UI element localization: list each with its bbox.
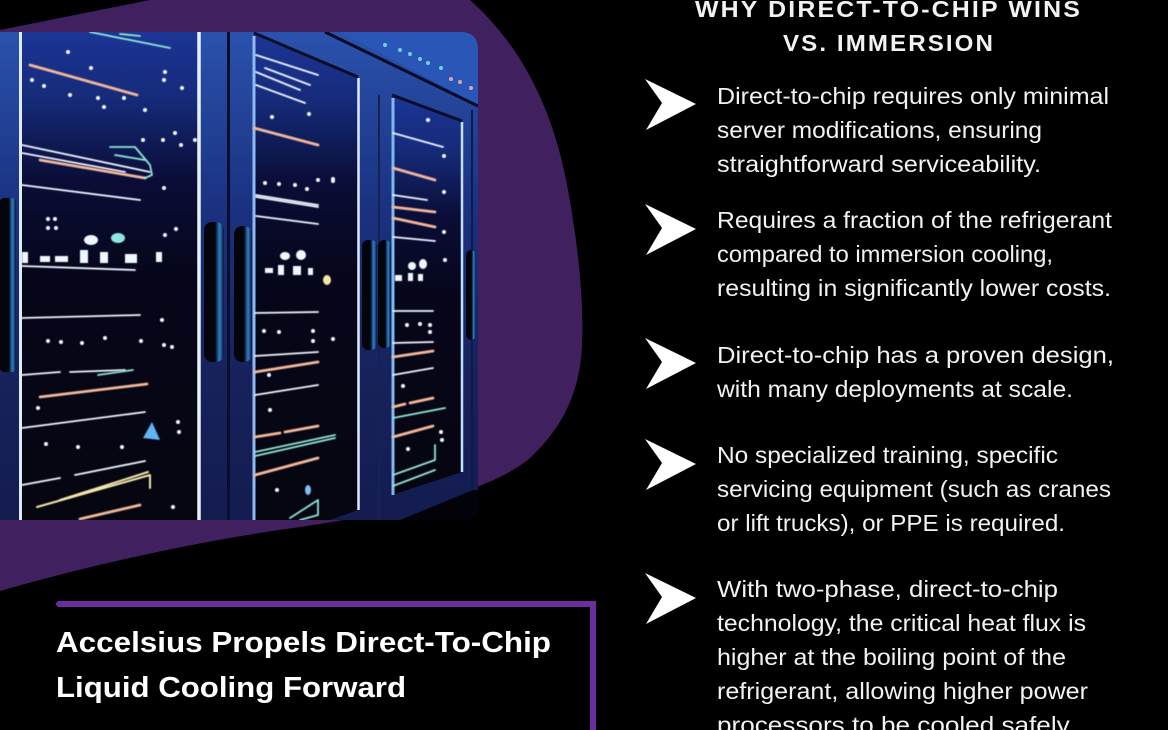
title box heading: Liquid Cooling Forward [56,672,406,704]
yellow rack lights [37,472,150,507]
teal rack lights [90,32,445,520]
text block: refrigerant costs: compared to immersion cooling, [717,241,1053,267]
section heading [695,0,1082,56]
door handles [0,198,476,372]
server rack photo [0,32,478,520]
glass door 3 [392,95,472,515]
title box: purple border [59,604,593,730]
rack frame [0,32,478,520]
text block: no specialized training [717,442,1111,536]
top bar of rack [325,32,478,106]
light clusters [22,233,427,495]
text block: proven design [716,342,1114,402]
text block: two-phase heat flux: technology, the critical heat flux is [717,610,1086,636]
text block: minimal modifications: Direct-to-chip requires only minimal [717,83,1109,109]
text block: refrigerant costs: resulting in significantly lower costs. [717,275,1111,301]
text block: refrigerant costs [717,207,1112,301]
text block: two-phase heat flux: refrigerant, allowing higher power [717,678,1088,704]
text block: minimal modifications [717,83,1109,177]
purple blob shape [0,0,582,591]
white rack lights [22,55,443,485]
text block: refrigerant costs: Requires a fraction of the refrigerant [717,207,1112,233]
rack dot lights [32,52,445,507]
title box heading: Accelsius Propels Direct-To-Chip [56,627,551,659]
text block: minimal modifications: straightforward serviceability. [717,151,1041,177]
glass door 2 [228,32,379,520]
text block: two-phase heat flux: With two-phase, direct-to-chip [717,576,1058,602]
icon: arrow 2 [645,204,696,255]
black base of rack [400,490,478,520]
icon: arrow 4 [645,439,696,490]
text block: proven design: with many deployments at scale. [716,376,1073,402]
text block: proven design: Direct-to-chip has a proven design, [717,342,1114,368]
title box heading [56,627,551,704]
text block: no specialized training: or lift trucks), or PPE is required. [717,510,1065,536]
icon: arrow 3 [645,338,696,389]
pink and orange rack lights [30,65,435,519]
text block: no specialized training: servicing equipment (such as cranes [717,476,1111,502]
icon: arrow 1 [645,79,696,130]
glass door 1 [20,32,199,520]
text block: two-phase heat flux [717,576,1088,730]
section heading: VS. IMMERSION [783,30,995,56]
text block: two-phase heat flux: higher at the boiling point of the [717,644,1066,670]
icon: arrow 5 [645,573,696,624]
text block: no specialized training: No specialized training, specific [717,442,1058,468]
text block: minimal modifications: server modifications, ensuring [717,117,1042,143]
